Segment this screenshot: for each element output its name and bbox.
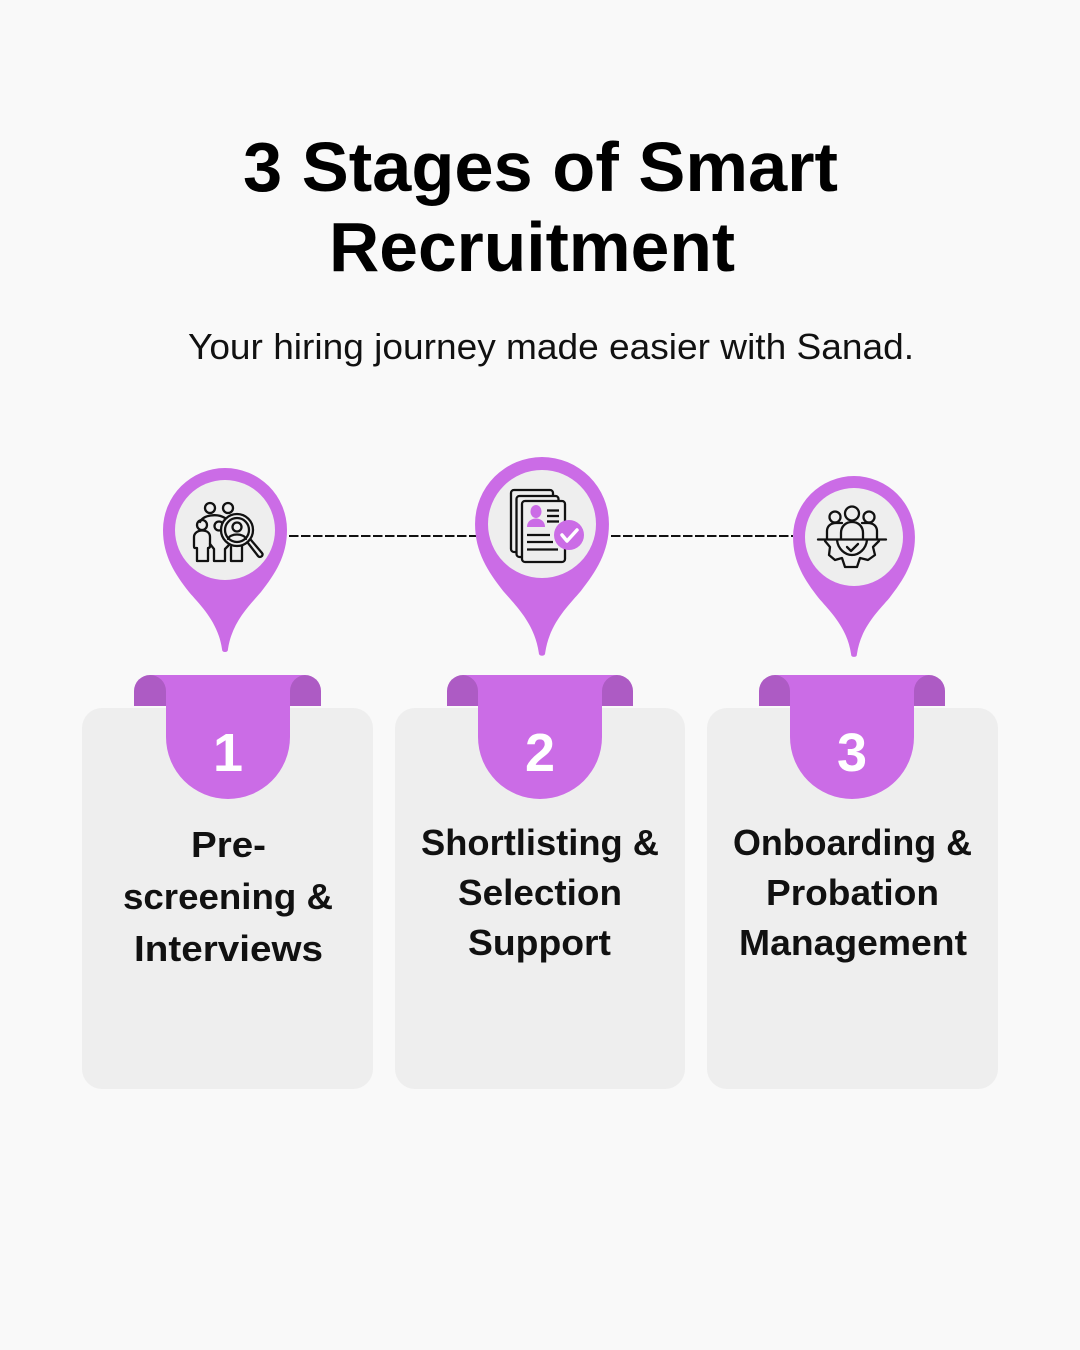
subtitle: Your hiring journey made easier with Sanad. bbox=[188, 326, 914, 367]
icon: people search bbox=[194, 503, 263, 561]
label: stage 1 bbox=[123, 824, 333, 969]
pin: stage 2 bbox=[475, 457, 609, 656]
ribbon: number 2: 2 bbox=[525, 723, 555, 783]
ribbon: number 3 bbox=[775, 675, 929, 799]
label: stage 2: Shortlisting & bbox=[421, 822, 659, 863]
title bbox=[243, 128, 838, 286]
label: stage 3: Management bbox=[739, 922, 967, 963]
panel: stage 1 bbox=[82, 675, 373, 1089]
label: stage 1: screening & bbox=[123, 876, 333, 917]
panel: stage 3 bbox=[707, 675, 998, 1089]
title: Recruitment bbox=[329, 208, 735, 286]
label: stage 2: Support bbox=[468, 922, 611, 963]
label: stage 2: Selection bbox=[458, 872, 622, 913]
panel: stage 2 bbox=[395, 675, 685, 1089]
label: stage 1: Interviews bbox=[134, 928, 323, 969]
title: 3 Stages of Smart bbox=[243, 128, 838, 206]
ribbon: number 1: 1 bbox=[213, 723, 243, 783]
pin: stage 1 bbox=[163, 468, 287, 652]
icon: team with gear bbox=[818, 506, 886, 567]
icon: resumes with check bbox=[511, 490, 584, 562]
label: stage 3 bbox=[733, 822, 972, 963]
ribbon: number 3: 3 bbox=[837, 723, 867, 783]
label: stage 3: Onboarding & bbox=[733, 822, 972, 863]
ribbon: number 2 bbox=[463, 675, 617, 799]
label: stage 3: Probation bbox=[766, 872, 939, 913]
pin: stage 3 bbox=[793, 476, 915, 657]
label: stage 2 bbox=[421, 822, 659, 963]
connector: stage 2 to stage 3 bbox=[611, 535, 793, 537]
ribbon: number 1 bbox=[150, 675, 305, 799]
connector: stage 1 to stage 2 bbox=[289, 535, 476, 537]
label: stage 1: Pre- bbox=[191, 824, 266, 865]
